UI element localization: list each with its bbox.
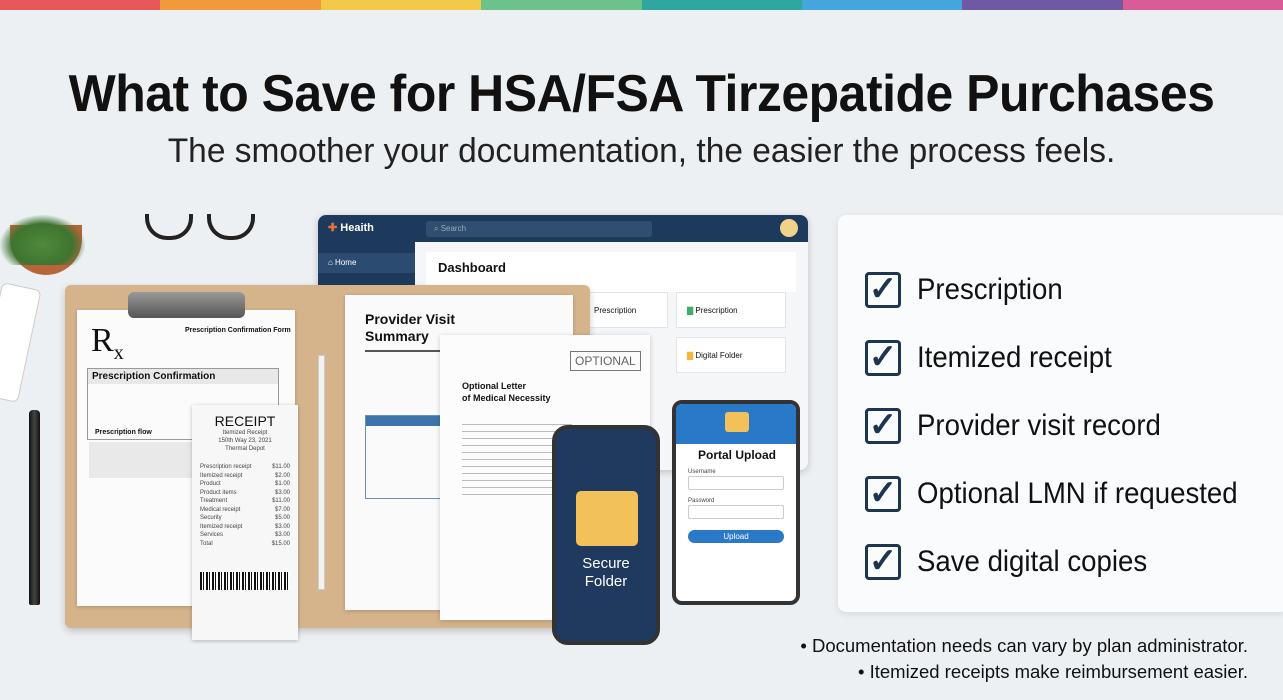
pencil <box>318 355 325 590</box>
receipt: Prescription receipt <box>200 464 251 470</box>
item: prescription <box>865 270 1063 308</box>
phone: portal upload: Upload <box>723 532 749 541</box>
item: save digital copies: ✓ <box>869 542 897 580</box>
icon: pen <box>29 410 40 605</box>
folder <box>65 285 590 628</box>
dashboard: ✚ Heaith <box>328 222 374 234</box>
provider visit summary: Summary <box>365 328 429 344</box>
receipt <box>192 405 298 640</box>
item: prescription: ✓ <box>869 270 897 308</box>
receipt: Itemized receipt <box>200 472 242 478</box>
footnotes <box>800 635 1248 682</box>
receipt: RECEIPT <box>215 413 275 429</box>
optional LMN letter: of Medical Necessity <box>462 393 551 403</box>
phone: portal upload <box>672 400 800 605</box>
title: What to Save for HSA/FSA Tirzepatide Purchases <box>69 65 1214 123</box>
prescription form: Prescription Confirmation <box>92 371 215 382</box>
receipt: $11.00 <box>272 498 290 504</box>
receipt: Thermal Depot <box>225 446 265 452</box>
receipt: $1.00 <box>275 481 290 487</box>
top color stripe <box>0 0 1283 10</box>
item: itemized receipt: ✓ <box>869 338 897 376</box>
receipt: Product items <box>200 490 237 496</box>
phone: portal upload: Username <box>688 469 716 475</box>
icon: plant <box>0 215 85 275</box>
icon: glasses <box>145 214 255 240</box>
prescription form: Prescription flow <box>95 429 152 436</box>
item: prescription: Prescription <box>917 273 1063 306</box>
receipt: Total <box>200 540 213 546</box>
dashboard: ▇ Digital Folder <box>687 351 743 360</box>
phone: portal upload: Password <box>688 498 714 504</box>
dashboard: ⌂ Home <box>328 258 356 267</box>
dashboard: Dashboard <box>438 260 506 275</box>
receipt: $2.00 <box>275 472 290 478</box>
optional LMN letter <box>440 335 650 620</box>
item: optional LMN: ✓ <box>869 474 897 512</box>
footnotes: • Documentation needs can vary by plan administrator. <box>800 635 1248 656</box>
provider visit summary: Provider Visit <box>365 311 455 327</box>
receipt: $5.00 <box>275 515 290 521</box>
receipt: 150th Way 23, 2021 <box>218 438 272 444</box>
prescription form: Prescription Confirmation Form <box>185 327 291 334</box>
footnotes: • Itemized receipts make reimbursement easier. <box>858 661 1248 682</box>
receipt: Treatment <box>200 498 227 504</box>
item: provider visit record: ✓ <box>869 406 897 444</box>
item: provider visit record: Provider visit record <box>917 409 1161 442</box>
receipt: Itemized Receipt <box>223 430 267 436</box>
subtitle: The smoother your documentation, the easier the process feels. <box>168 132 1115 170</box>
receipt: $3.00 <box>275 524 290 530</box>
receipt: Itemized receipt <box>200 524 242 530</box>
receipt: $15.00 <box>272 540 290 546</box>
clipboard clip <box>128 292 245 318</box>
receipt: $7.00 <box>275 506 290 512</box>
dashboard: ▇ Prescription <box>687 306 738 315</box>
phone: portal upload: Portal Upload <box>698 448 776 462</box>
prescription form: Rx <box>91 322 124 364</box>
panel: checklist <box>838 215 1283 612</box>
dashboard <box>318 215 808 470</box>
receipt: $3.00 <box>275 490 290 496</box>
receipt: Security <box>200 515 222 521</box>
item: optional LMN: Optional LMN if requested <box>917 477 1238 510</box>
provider visit summary <box>345 295 573 610</box>
receipt: Product <box>200 481 221 487</box>
receipt: $11.00 <box>272 464 290 470</box>
icon: keyboard <box>0 282 42 403</box>
phone: secure folder <box>552 425 660 645</box>
receipt: Services <box>200 532 223 538</box>
phone: secure folder: Secure <box>582 555 630 572</box>
item: save digital copies: Save digital copies <box>917 545 1147 578</box>
optional LMN letter: Optional Letter <box>462 381 526 391</box>
item: itemized receipt: Itemized receipt <box>917 341 1112 374</box>
dashboard: ⌕ Search <box>434 224 466 233</box>
dashboard: Prescription <box>594 306 636 315</box>
receipt: Medical receipt <box>200 506 240 512</box>
optional LMN letter: OPTIONAL <box>575 354 636 368</box>
item: itemized receipt <box>865 338 1112 376</box>
prescription form <box>77 310 295 606</box>
phone: secure folder: Folder <box>585 573 627 590</box>
receipt: $3.00 <box>275 532 290 538</box>
